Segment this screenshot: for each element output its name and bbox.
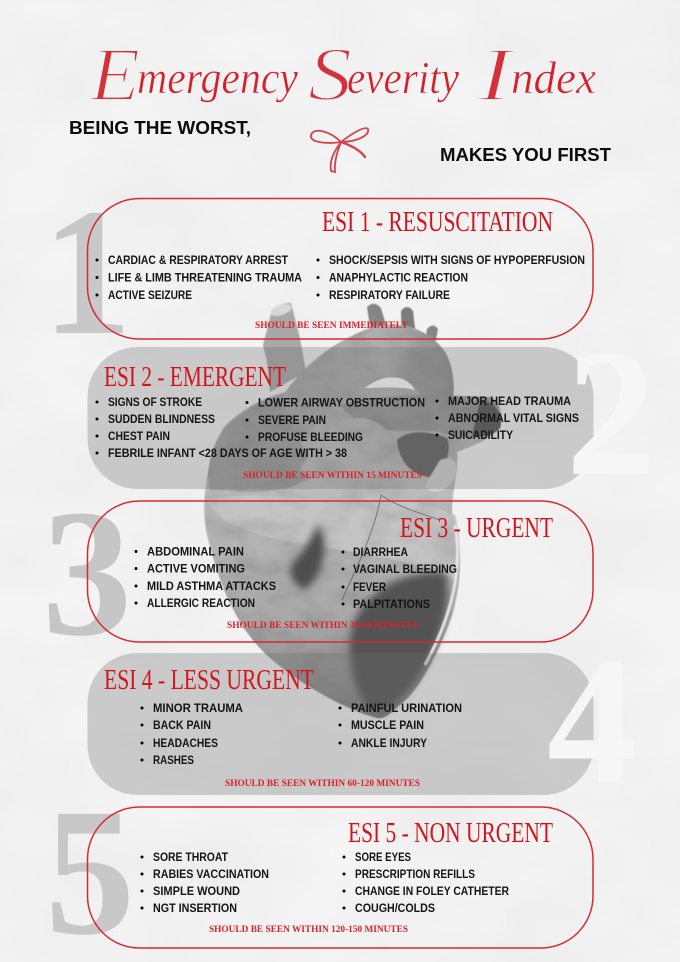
list: ESI 4 column 1: MINOR TRAUMA xyxy=(153,701,243,715)
list: ESI 2 column 2 xyxy=(246,396,425,444)
list: ESI 3 column 1: ACTIVE VOMITING xyxy=(147,562,245,576)
note: ESI 3 timing: SHOULD BE SEEN WITHIN 30-60 MINUTES xyxy=(227,620,418,630)
list: ESI 4 column 1: HEADACHES xyxy=(153,736,218,750)
list: ESI 3 column 2: PALPITATIONS xyxy=(353,597,430,611)
list: ESI 5 column 1: SIMPLE WOUND xyxy=(153,884,240,898)
title: mergency xyxy=(137,52,299,103)
list: ESI 5 column 1: SORE THROAT xyxy=(153,850,229,864)
list: ESI 1 column 1: ACTIVE SEIZURE xyxy=(108,288,192,302)
list: ESI 2 column 1: SUDDEN BLINDNESS xyxy=(108,412,215,426)
title xyxy=(89,33,597,117)
list: ESI 5 column 1: RABIES VACCINATION xyxy=(153,867,269,881)
list: ESI 2 column 2: PROFUSE BLEEDING xyxy=(258,430,363,444)
title: I xyxy=(477,33,517,117)
list: ESI 2 column 2: LOWER AIRWAY OBSTRUCTION xyxy=(258,396,425,410)
list: ESI 4 column 2: MUSCLE PAIN xyxy=(351,718,424,732)
list: ESI 3 column 2: DIARRHEA xyxy=(353,545,408,559)
list: ESI 1 column 2: RESPIRATORY FAILURE xyxy=(329,288,450,302)
list: ESI 4 column 1 xyxy=(140,701,243,767)
list: ESI 5 column 2: CHANGE IN FOLEY CATHETER xyxy=(355,884,509,898)
list: ESI 2 column 3: SUICADILITY xyxy=(448,428,513,442)
note: ESI 4 timing: SHOULD BE SEEN WITHIN 60-120 MINUTES xyxy=(225,778,420,788)
list: ESI 2 column 3: ABNORMAL VITAL SIGNS xyxy=(448,411,579,425)
list: ESI 5 column 2: COUGH/COLDS xyxy=(355,901,435,915)
subtitle right: MAKES YOU FIRST xyxy=(440,145,611,165)
panel: ESI 3 xyxy=(88,501,593,642)
panel: ESI 1 xyxy=(88,198,593,339)
heading: ESI 5: ESI 5 - NON URGENT xyxy=(348,817,553,849)
number 1: 1 xyxy=(42,172,132,373)
list: ESI 3 column 2: FEVER xyxy=(353,580,386,594)
heading: ESI 4: ESI 4 - LESS URGENT xyxy=(104,664,314,696)
heart surface texture xyxy=(204,324,501,718)
list: ESI 2 column 3 xyxy=(436,394,579,442)
title: E xyxy=(89,33,140,117)
number 2: 2 xyxy=(566,313,656,514)
note: ESI 2 timing: SHOULD BE SEEN WITHIN 15 MINUTES xyxy=(243,470,422,480)
icon: ribbon bow xyxy=(311,128,368,172)
list: ESI 3 column 2: VAGINAL BLEEDING xyxy=(353,562,457,576)
list: ESI 2 column 1 xyxy=(96,395,347,460)
list: ESI 1 column 1: CARDIAC & RESPIRATORY ARREST xyxy=(108,253,289,267)
panel: ESI 4 xyxy=(88,653,594,795)
note: ESI 5 timing: SHOULD BE SEEN WITHIN 120-150 MINUTES xyxy=(209,924,408,934)
list: ESI 5 column 2 xyxy=(342,850,509,915)
list: ESI 1 column 2: ANAPHYLACTIC REACTION xyxy=(329,270,468,284)
note: ESI 1 timing: SHOULD BE SEEN IMMEDIATELY xyxy=(255,320,409,330)
title: S xyxy=(308,33,352,117)
list: ESI 3 column 2 xyxy=(342,545,457,611)
panel: ESI 2 xyxy=(88,347,594,489)
title: everity xyxy=(347,52,460,103)
list: ESI 4 column 2: ANKLE INJURY xyxy=(351,736,427,750)
list: ESI 4 column 1: BACK PAIN xyxy=(153,718,211,732)
list: ESI 3 column 1: ABDOMINAL PAIN xyxy=(147,544,244,558)
list: ESI 2 column 2: SEVERE PAIN xyxy=(258,413,326,427)
heading: ESI 1: ESI 1 - RESUSCITATION xyxy=(322,206,553,238)
subtitle left: BEING THE WORST, xyxy=(69,118,251,138)
list: ESI 3 column 1 xyxy=(134,544,276,610)
panel: ESI 5 xyxy=(88,807,593,948)
list: ESI 4 column 2 xyxy=(338,701,462,750)
heading: ESI 2: ESI 2 - EMERGENT xyxy=(104,361,286,393)
heading: ESI 3: ESI 3 - URGENT xyxy=(400,512,553,544)
list: ESI 5 column 2: SORE EYES xyxy=(355,850,411,864)
list: ESI 1 column 1: LIFE & LIMB THREATENING TRAUMA xyxy=(108,270,302,284)
list: ESI 2 column 3: MAJOR HEAD TRAUMA xyxy=(448,394,571,408)
list: ESI 4 column 2: PAINFUL URINATION xyxy=(351,701,462,715)
list: ESI 1 column 2: SHOCK/SEPSIS WITH SIGNS OF HYPOPERFUSION xyxy=(329,253,585,267)
title: ndex xyxy=(511,52,597,103)
heart illustration xyxy=(204,302,501,718)
number 3: 3 xyxy=(42,473,132,674)
list: ESI 2 column 1: SIGNS OF STROKE xyxy=(108,395,202,409)
list: ESI 5 column 1 xyxy=(140,850,269,915)
list: ESI 2 column 1: FEBRILE INFANT <28 DAYS OF AGE WITH > 38 xyxy=(108,446,347,460)
list: ESI 3 column 1: ALLERGIC REACTION xyxy=(147,596,255,610)
list: ESI 5 column 2: PRESCRIPTION REFILLS xyxy=(355,867,475,881)
list: ESI 5 column 1: NGT INSERTION xyxy=(153,901,237,915)
list: ESI 2 column 1: CHEST PAIN xyxy=(108,429,170,443)
list: ESI 1 column 2 xyxy=(316,253,585,302)
number 4: 4 xyxy=(547,621,637,822)
list: ESI 3 column 1: MILD ASTHMA ATTACKS xyxy=(147,579,276,593)
list: ESI 4 column 1: RASHES xyxy=(153,753,194,767)
list: ESI 1 column 1 xyxy=(96,253,302,302)
